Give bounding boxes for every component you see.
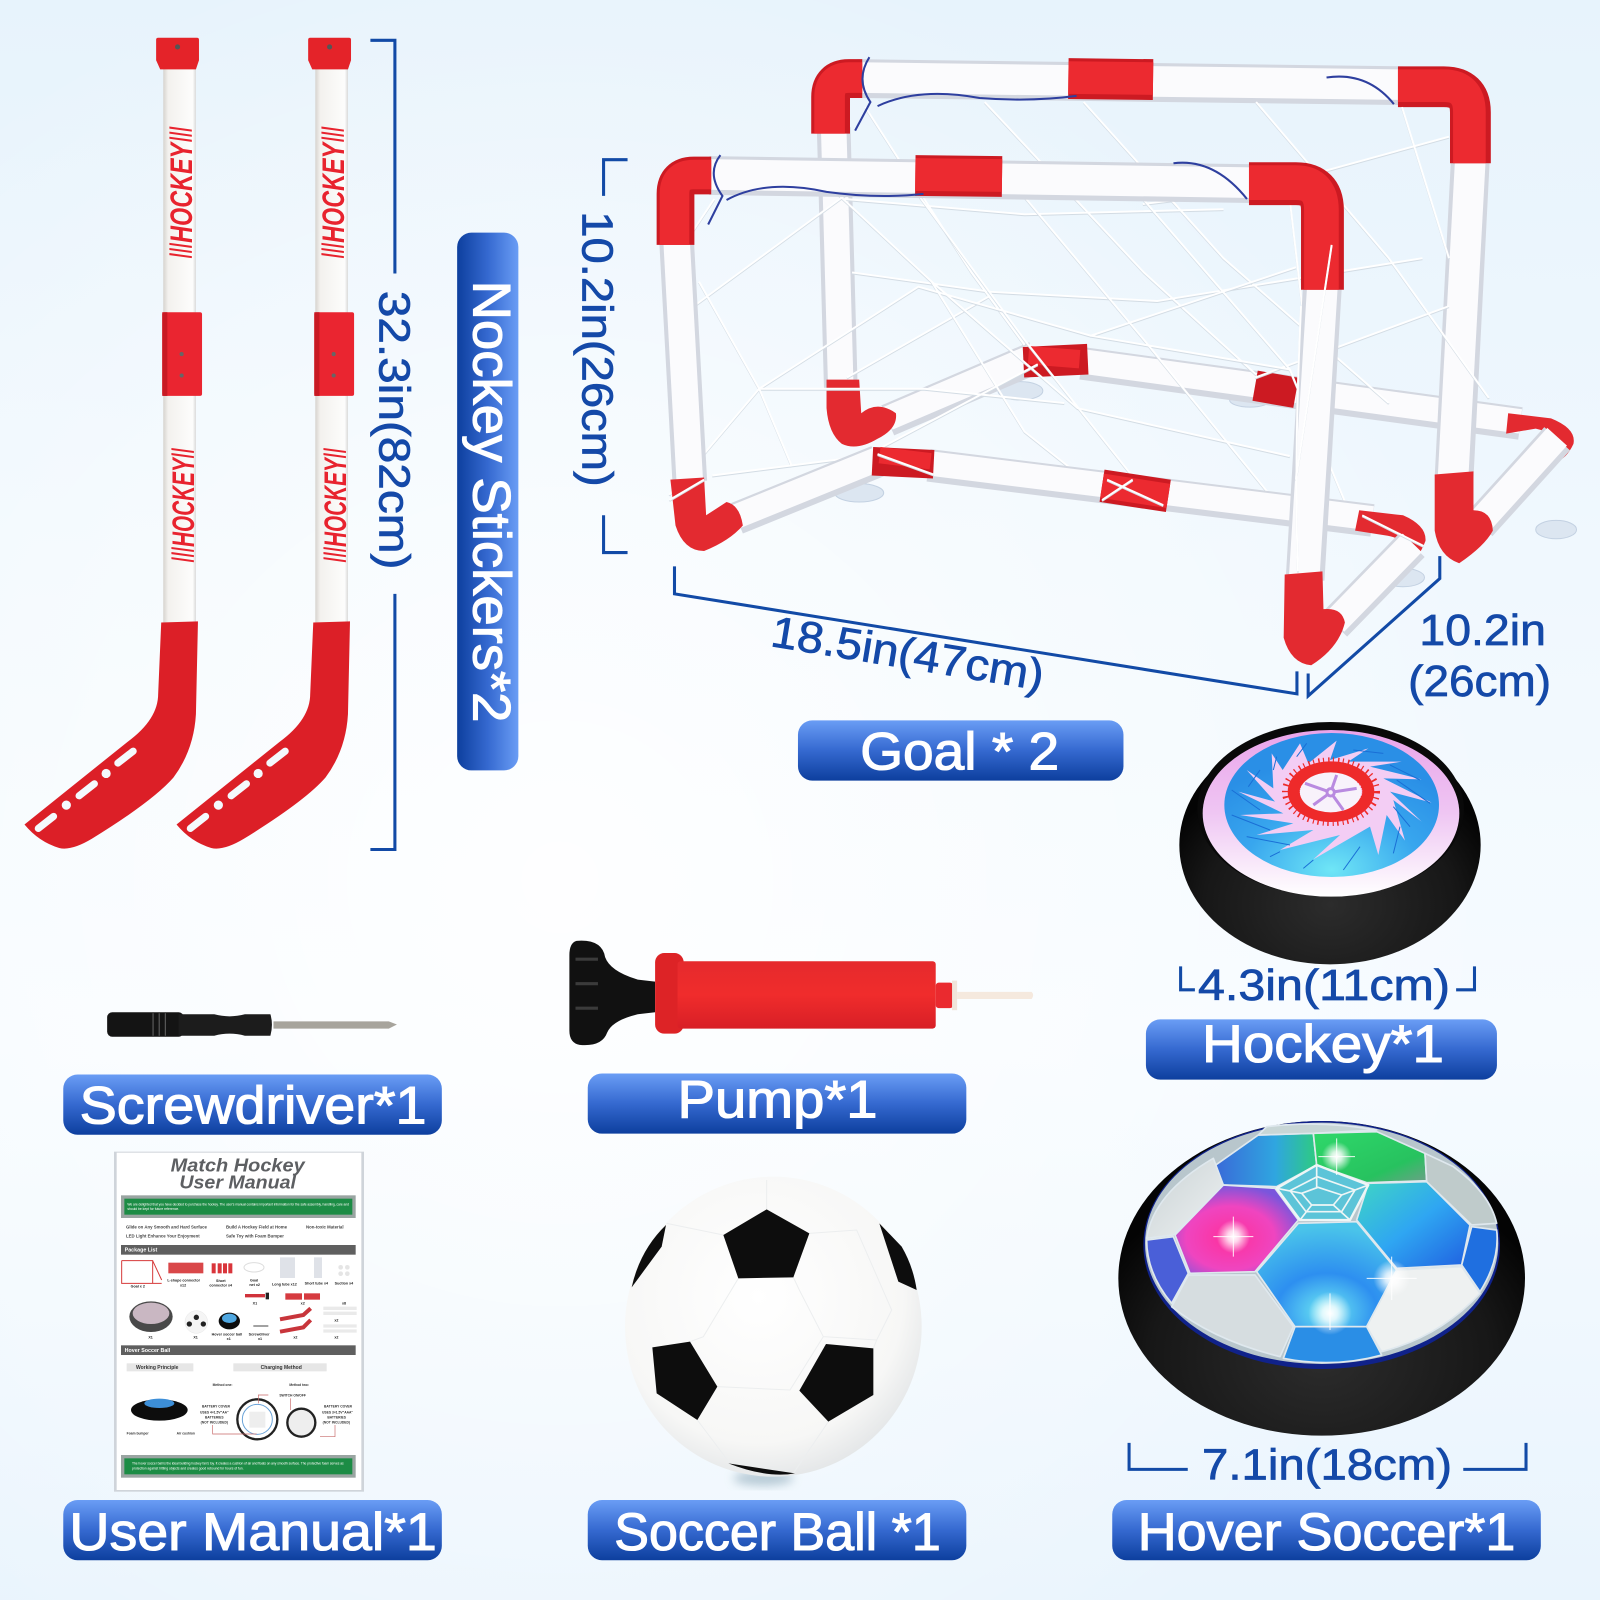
manual sub headings: [127, 1363, 327, 1371]
manual diagrams: Method one:: [213, 1383, 232, 1387]
back goal foot elbows: [827, 380, 1493, 563]
label: Screwdriver*1: Screwdriver*1: [80, 1076, 427, 1135]
middle connector: [162, 312, 202, 396]
hockey puck: [1179, 722, 1481, 964]
manual package items: L-shape connector: [167, 1278, 201, 1282]
manual package items: x1: [258, 1337, 262, 1341]
manual package items: x2: [301, 1301, 305, 1305]
swirl pattern: [1238, 741, 1432, 859]
label: Pump*1: Pump*1: [678, 1070, 878, 1129]
pump: [569, 941, 1033, 1045]
hockey stick 1: [24, 38, 202, 849]
back goal base tubes: [888, 355, 1520, 423]
manual intro banner: [121, 1195, 356, 1218]
goal depth dimension: [1308, 556, 1440, 696]
manual features: LED Light Enhance Your Enjoyment: [126, 1234, 200, 1239]
manual package items: X1: [148, 1336, 153, 1340]
back goal uprights and crossbar: [830, 78, 1557, 524]
goal depth dimension text: 10.2in: [1419, 606, 1546, 655]
front goal net: [669, 194, 1356, 529]
text: hockey sticker lower: [317, 448, 353, 562]
label: User Manual*1: User Manual*1: [69, 1503, 437, 1562]
screwdriver: [107, 1012, 397, 1037]
manual diagrams: BATTERIES: [327, 1416, 347, 1420]
manual diagrams: Method two:: [289, 1383, 309, 1387]
goal height dimension text: 10.2in(26cm): [573, 211, 622, 487]
manual package items: X1: [193, 1336, 198, 1340]
back goal suction cups: [998, 382, 1577, 539]
manual diagrams: Foam bumper: [127, 1432, 149, 1436]
manual diagrams: Air cushion: [177, 1432, 195, 1436]
middle connector: [314, 312, 354, 396]
manual features: [126, 1225, 344, 1239]
front goal rear corner: [1355, 510, 1426, 561]
text: hockey sticker upper: HOCKEY: [163, 141, 199, 243]
manual package items: Short: [216, 1279, 226, 1283]
text: hockey sticker lower: [165, 448, 201, 562]
sparkles: [1213, 1138, 1417, 1335]
manual sub headings: Working Principle: [136, 1365, 179, 1371]
manual intro banner: should be kept for future reference.: [127, 1207, 179, 1211]
goal width dimension: [674, 566, 1297, 694]
text: hockey sticker upper: HOCKEY: [315, 141, 351, 243]
manual package items: [122, 1257, 357, 1341]
label: Hockey*1: Hockey*1: [1202, 1015, 1444, 1074]
front goal uprights and crossbar: [674, 174, 1412, 624]
manual footer banner: [121, 1455, 356, 1478]
label: Goal * 2: Goal * 2: [860, 722, 1059, 781]
hockey stick 2: [177, 38, 354, 849]
pump barrel: [655, 953, 936, 1034]
stick length dimension text: 32.3in(82cm): [370, 291, 419, 569]
manual title: Match Hockey: [171, 1155, 306, 1175]
front goal: [669, 155, 1426, 665]
hub spokes: [1305, 775, 1357, 810]
label: Pump*1: [588, 1070, 966, 1134]
manual diagrams: BATTERIES: [205, 1415, 224, 1419]
manual package list header: Package List: [125, 1248, 157, 1254]
front goal blue string: [708, 155, 1247, 224]
manual diagrams: USES 3×1.5V"AAA": [322, 1411, 353, 1415]
manual package list header: [121, 1245, 356, 1255]
manual package items: Screwdriver: [249, 1332, 270, 1336]
hover soccer dimension bracket: [1129, 1443, 1526, 1469]
goal height dimension bracket: [604, 160, 628, 553]
manual package items: x12: [180, 1284, 186, 1288]
manual package items: x1: [227, 1337, 231, 1341]
hover soccer dimension text: 7.1in(18cm): [1202, 1441, 1452, 1490]
manual package items: Hover soccer ball: [212, 1332, 242, 1336]
back goal blue string: [855, 57, 1394, 131]
manual features: Safe Toy with Foam Bumper: [226, 1234, 284, 1239]
manual package items: Goal: [250, 1278, 258, 1282]
label: Hockey*1: [1146, 1015, 1497, 1080]
front goal foot elbows: [670, 478, 1345, 665]
back goal: [827, 57, 1577, 563]
manual hover soccer header: Hover Soccer Ball: [125, 1348, 171, 1354]
manual diagrams: SWITCH ON/OFF: [279, 1394, 306, 1398]
label: Soccer Ball *1: Soccer Ball *1: [614, 1503, 941, 1562]
manual package items: X1: [253, 1301, 257, 1305]
manual package items: net x2: [249, 1283, 260, 1287]
red spiky ring: [1291, 766, 1371, 817]
front goal overlaid net: [669, 245, 1423, 571]
manual package items: Short tube x4: [305, 1282, 329, 1286]
soccer ball: [625, 1177, 922, 1486]
manual features: Build A Hockey Field at Home: [226, 1225, 288, 1230]
label: Hover Soccer*1: Hover Soccer*1: [1138, 1503, 1515, 1562]
manual package items: x2: [334, 1319, 338, 1323]
manual footer banner: The hover soccer ball is the ideal building hockey fan's toy. It creates a cushion of air and floats on any smooth surface. The protective foam serves as: [132, 1462, 344, 1466]
blade: [177, 621, 350, 849]
manual diagrams: USES 4×1.5V"AA": [200, 1410, 229, 1414]
front goal base tubes: [737, 455, 1372, 520]
manual package items: Suction x4: [335, 1282, 354, 1286]
back goal rear corner: [1506, 413, 1574, 461]
manual package items: Goal x 2: [131, 1284, 145, 1288]
front goal suction cups: [835, 484, 1424, 587]
manual title: User Manual: [179, 1172, 297, 1192]
manual package items: connector x4: [209, 1284, 233, 1288]
manual package items: Long tube x12: [272, 1282, 297, 1286]
pump nozzle: [936, 981, 1033, 1010]
manual diagrams: BATTERY COVER: [202, 1404, 231, 1408]
hockey puck dimension text: 4.3in(11cm): [1198, 961, 1450, 1010]
manual diagrams: [127, 1383, 353, 1439]
text: hockey sticker lower: HOCKEY: [317, 456, 353, 547]
manual features: Non-toxic Material: [306, 1225, 344, 1230]
stick length dimension bracket: [370, 40, 395, 849]
top cap: [156, 38, 199, 69]
manual title: [171, 1155, 306, 1192]
manual features: Glide on Any Smooth and Hard Surface: [126, 1225, 207, 1230]
blade: [24, 621, 198, 849]
manual hover soccer header: [121, 1345, 356, 1355]
manual package items: x8: [342, 1301, 346, 1305]
manual diagrams: (NOT INCLUDED): [201, 1421, 228, 1425]
back goal net: [845, 102, 1489, 403]
manual intro banner: We are delighted that you have decided to purchase the hockey. The user's manual contains important information for the safe assembly, handling, care and: [127, 1202, 349, 1206]
manual footer banner: protection against hitting objects and creates good rebound for hours of fun.: [132, 1466, 244, 1470]
hockey puck dimension bracket: [1181, 966, 1474, 990]
pump handle: [569, 941, 655, 1045]
manual package items: x2: [334, 1336, 338, 1340]
goal depth dimension text: [1408, 606, 1551, 706]
text: hockey sticker lower: HOCKEY: [165, 456, 201, 547]
user manual: [114, 1152, 364, 1492]
manual package items: x2: [293, 1336, 297, 1340]
manual diagrams: (NOT INCLUDED): [323, 1421, 350, 1425]
manual sub headings: Charging Method: [261, 1365, 302, 1371]
web pentagon: [1277, 1165, 1368, 1220]
ball seams: [667, 1180, 892, 1473]
manual diagrams: BATTERY COVER: [324, 1405, 353, 1409]
label: Nockey Stickers*2: Nockey Stickers*2: [461, 281, 520, 722]
ball black panels: [632, 1209, 917, 1475]
hover soccer disc: [1118, 1121, 1525, 1436]
label: Goal * 2: [798, 720, 1123, 781]
panels: [1147, 1124, 1497, 1363]
top cap: [308, 38, 351, 69]
goal width dimension text: 18.5in(47cm): [768, 607, 1048, 700]
goal depth dimension text: (26cm): [1408, 657, 1551, 706]
